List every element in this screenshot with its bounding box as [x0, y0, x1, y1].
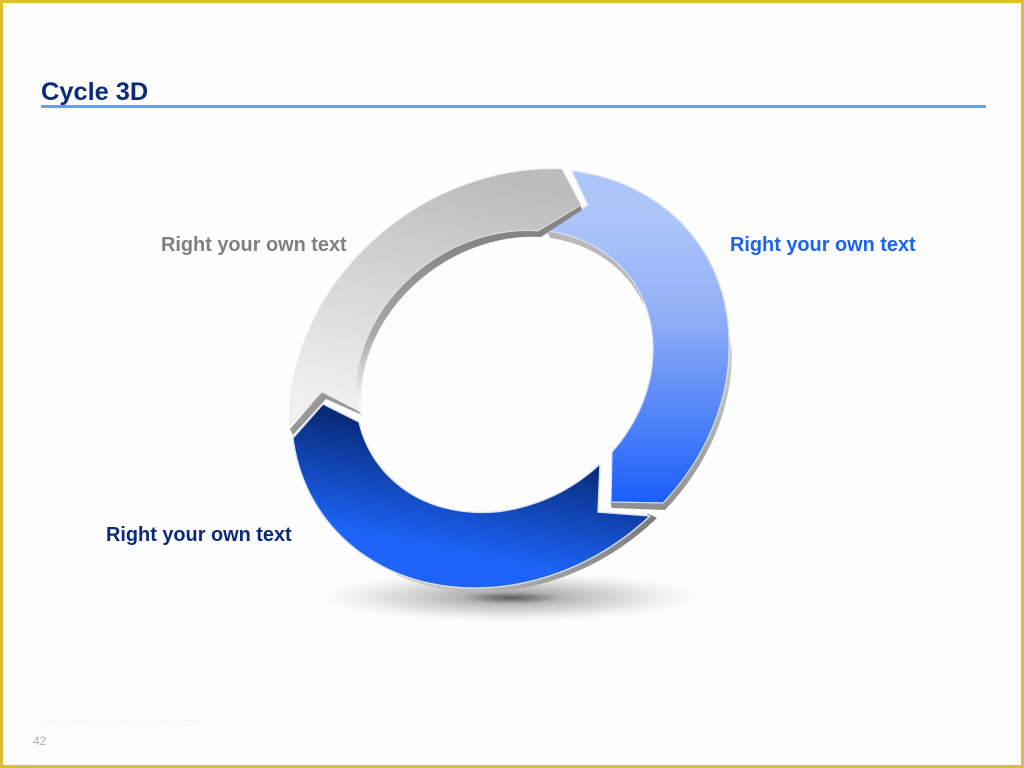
page number: 42 [33, 734, 46, 748]
3D edge: dark blue arrow [395, 514, 657, 592]
label: gray segment: Right your own text [161, 234, 347, 256]
3D edge: gray arrow inner [345, 204, 582, 415]
title underline [41, 105, 986, 108]
segment: light blue arrow [547, 171, 732, 510]
3D edge: light blue arrow outer [610, 300, 732, 510]
3D edge: light blue arrow inner [547, 225, 660, 303]
ground shadow [320, 572, 700, 622]
surface: gray arrow [290, 169, 581, 425]
title: Cycle 3D [41, 78, 148, 106]
notch edge: gray arrow [290, 392, 362, 435]
label: dark blue segment: Right your own text [106, 524, 292, 546]
segment: gray arrow [290, 169, 582, 435]
label: light blue segment: Right your own text [730, 234, 916, 256]
watermark: www.heritagechristiancollege.com [41, 717, 201, 729]
segment: dark blue arrow [293, 404, 657, 592]
surface: dark blue arrow [293, 404, 650, 588]
surface: light blue arrow [548, 171, 729, 503]
